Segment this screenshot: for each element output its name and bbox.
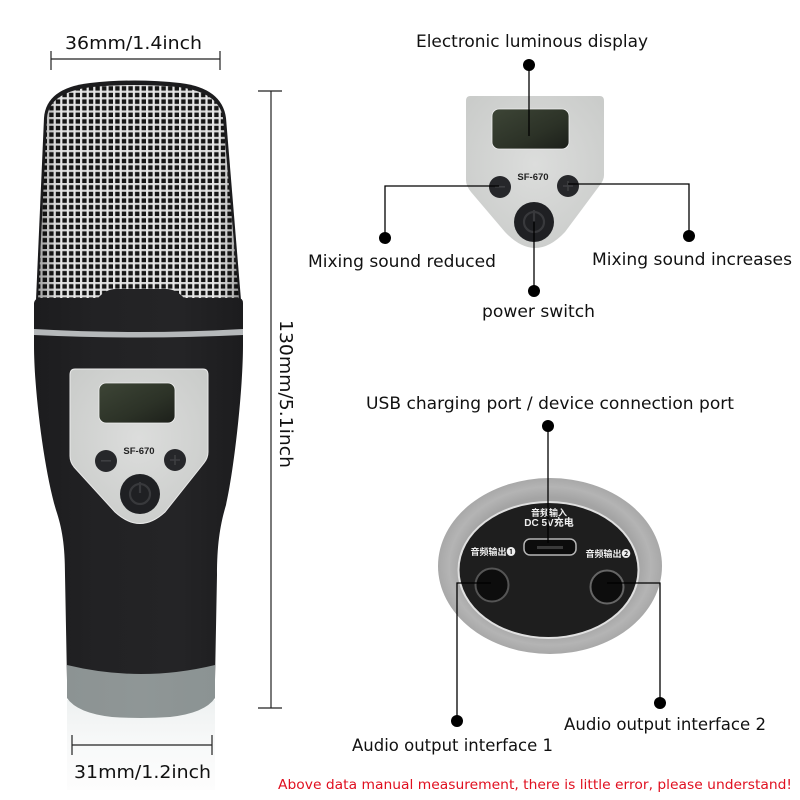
usb port	[524, 539, 576, 555]
callout: increase	[568, 184, 792, 269]
port labels	[470, 507, 631, 559]
callout: output 1	[352, 583, 553, 755]
port labels: 音频输出❷	[585, 548, 631, 559]
microphone	[34, 80, 243, 790]
detail display	[492, 109, 569, 149]
callout: power: power switch	[482, 302, 595, 321]
dimension: height	[258, 91, 296, 708]
callout: reduce: Mixing sound reduced	[308, 252, 496, 271]
display	[99, 383, 175, 423]
dimension: bottom width: 31mm/1.2inch	[74, 762, 211, 783]
callout: output 2	[564, 583, 766, 734]
minus button	[95, 450, 117, 472]
dimension: top width: 36mm/1.4inch	[65, 33, 202, 54]
grey base	[67, 665, 215, 718]
dimension: height: 130mm/5.1inch	[275, 320, 296, 468]
callout: output 1: Audio output interface 1	[352, 736, 553, 755]
control panel detail	[466, 96, 604, 248]
dimension: top width	[51, 33, 220, 70]
port labels: 音频输入	[531, 507, 567, 518]
dimension: bottom width	[72, 735, 212, 783]
plus button	[164, 449, 186, 471]
callout: display	[416, 32, 648, 136]
detail minus button	[489, 176, 511, 198]
disclaimer: Above data manual measurement, there is little error, please understand!	[278, 778, 792, 793]
base port detail	[438, 478, 662, 654]
port labels: DC 5V充电	[524, 516, 574, 529]
callout: display: Electronic luminous display	[416, 32, 648, 51]
control plate	[70, 369, 208, 524]
base reflection	[67, 700, 215, 790]
detail power button	[514, 202, 554, 242]
body	[34, 289, 243, 680]
detail plus button	[557, 175, 579, 197]
callout: usb: USB charging port / device connection port	[366, 394, 735, 413]
callout: output 2: Audio output interface 2	[564, 715, 766, 734]
silver ring	[34, 329, 243, 338]
callout: reduce	[308, 186, 499, 271]
jack 1	[476, 568, 508, 602]
detail model text: SF-670	[517, 172, 549, 183]
callout: increase: Mixing sound increases	[592, 250, 792, 269]
callout: power	[482, 222, 595, 321]
port labels: 音频输出❶	[470, 546, 516, 557]
grille frame	[36, 80, 241, 300]
model text: SF-670	[123, 446, 155, 457]
power button	[120, 474, 160, 514]
mesh grille	[38, 85, 239, 300]
callout: usb	[366, 394, 735, 543]
jack 2	[590, 570, 624, 604]
